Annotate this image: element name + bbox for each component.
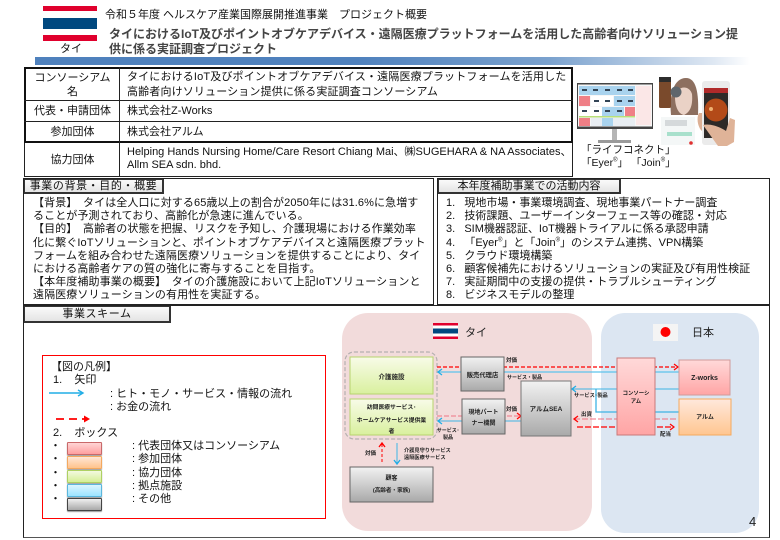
box: Z-Works xyxy=(679,360,730,395)
arrow: investment xyxy=(574,416,676,422)
row value: consortium name: タイにおけるIoT及びポイントオブケアデバイス・遠隔医療プラットフォームを活用した xyxy=(127,71,566,83)
image caption xyxy=(581,144,676,168)
row value: participant: 株式会社アルム xyxy=(127,126,204,138)
numbered list: 4. 「Eyer®」と「Join®」のシステム連携、VPN構築 xyxy=(446,237,703,249)
legend box descriptions: : 参加団体 xyxy=(132,453,182,465)
image caption: 「ライフコネクト」 xyxy=(581,144,676,156)
numbered list: 2. 技術課題、ユーザーインターフェース等の確認・対応 xyxy=(446,210,727,222)
legend bullets: ・ xyxy=(50,480,61,492)
body text: 化に繋ぐIoTソリューションと、ポイントオブケアデバイスと遠隔医療プラット xyxy=(33,237,426,249)
legend bullets: ・ xyxy=(50,493,61,505)
swatch: participant xyxy=(67,456,102,469)
arrow: service and product to Allm SEA xyxy=(572,386,679,392)
numbered list: 8. ビジネスモデルの整理 xyxy=(446,289,574,301)
eye scanner and face photo xyxy=(659,77,698,115)
flow label: payment at partner: 対価 xyxy=(506,405,518,413)
flow label: service to Allm SEA: サービス･製品 xyxy=(574,391,608,399)
header gradient bar xyxy=(35,57,750,65)
legend box descriptions: : 拠点施設 xyxy=(132,480,182,492)
box: distributor: 販売代理店 xyxy=(467,370,499,379)
legend box descriptions: : その他 xyxy=(132,493,171,505)
box: customers xyxy=(350,467,433,502)
product image: monitor, eye examination and phone xyxy=(577,77,735,146)
lower row frame xyxy=(24,143,573,177)
heading xyxy=(438,179,621,194)
numbered list: 5. クラウド環境構築 xyxy=(446,250,552,262)
arrow: care services to customer xyxy=(394,443,400,464)
body text: 【背景】 タイは全人口に対する65歳以上の割合が2050年には31.6%に急増す xyxy=(33,197,418,209)
swatch: other xyxy=(67,498,102,511)
flag label: タイ xyxy=(60,43,82,55)
legend box descriptions: : 代表団体又はコンソーシアム xyxy=(132,440,280,452)
body text: 【本年度補助事業の概要】 タイの介護施設において上記IoTソリューションと xyxy=(33,276,421,288)
body text: 遠隔医療ソリューションの有用性を実証する。 xyxy=(33,289,266,301)
legend text: flow of people and goods: : ヒト・モノ・サービス・情報の流れ xyxy=(110,388,292,400)
column divider xyxy=(119,67,120,177)
box: Allm xyxy=(679,399,731,435)
phone with retina image xyxy=(698,81,735,146)
title: タイにおけるIoT及びポイントオブケアデバイス・遠隔医療プラットフォームを活用した高齢者向けソリューション提 xyxy=(109,27,738,41)
box: consortium: コンソーシ xyxy=(623,390,649,397)
header subtitle: 令和５年度 ヘルスケア産業国際展開推進事業 プロジェクト概要 xyxy=(105,9,427,21)
row value: cooperating organisations xyxy=(127,146,571,171)
arrow: payment from care facility through distributor to Z-Works xyxy=(437,364,678,370)
legend section: boxes: 2. ボックス xyxy=(53,427,118,439)
panel: business scheme frame xyxy=(23,305,770,538)
row label: consortium name xyxy=(34,72,110,98)
legend arrow: flow of money xyxy=(56,416,90,422)
panel: Thailand xyxy=(342,313,592,531)
numbered list: 7. 実証期間中の支援の提供・トラブルシューティング xyxy=(446,276,717,288)
body text: における高齢者ケアの質の強化に寄与することを目指す。 xyxy=(33,263,320,275)
panel: background and purpose xyxy=(23,178,434,305)
flow label: service at partner: 製品 xyxy=(443,434,453,441)
box: care facility: 介護施設 xyxy=(378,372,405,381)
row label: consortium name: 名 xyxy=(67,86,78,98)
heading: 事業スキーム xyxy=(62,308,132,320)
flow label: dividend: 配当 xyxy=(660,430,671,438)
box: local partner: 現地パート xyxy=(468,408,499,416)
icon: small Thai flag xyxy=(433,323,458,339)
row label: representative: 代表・申請団体 xyxy=(34,105,111,117)
box: distributor xyxy=(461,357,504,391)
legend section: arrows: 1. 矢印 xyxy=(53,374,96,386)
row label: participant: 参加団体 xyxy=(50,126,94,138)
legend bullets xyxy=(50,440,61,505)
arrow: service and product to care facility xyxy=(438,369,679,375)
numbered list: 6. 顧客候補先におけるソリューションの実証及び有用性検証 xyxy=(446,263,750,275)
flow label: care services xyxy=(404,446,451,461)
icon: Thai flag xyxy=(43,6,97,41)
heading xyxy=(24,306,171,323)
swatch: base facility xyxy=(67,484,102,497)
box: home care provider: ホームケアサービス提供業 xyxy=(357,416,426,424)
dashed group: care providers xyxy=(345,352,437,439)
box: consortium: アム xyxy=(631,398,642,405)
swatch: representative xyxy=(67,442,102,455)
heading: 本年度補助事業での活動内容 xyxy=(458,180,600,192)
flow label: service at distributor: サービス・製品 xyxy=(507,374,542,381)
row value: consortium name: 高齢者向けソリューション提供に係る実証調査コンソーシアム xyxy=(127,86,438,98)
row divider one xyxy=(24,100,573,101)
thick table frame xyxy=(24,67,573,143)
legend title: 【図の凡例】 xyxy=(51,361,117,373)
legend bullets: ・ xyxy=(50,453,61,465)
panel: activities this fiscal year xyxy=(437,178,770,305)
row label: cooperating organisations: 協力団体 xyxy=(50,154,94,166)
numbered list xyxy=(446,196,750,301)
box: Z-Works: Z-works xyxy=(691,375,718,382)
title xyxy=(109,27,738,56)
legend box descriptions: : 協力団体 xyxy=(132,467,182,479)
box: home care provider: 訪問医療サービス･ xyxy=(367,403,416,411)
legend xyxy=(42,355,326,519)
arrow: customer payment xyxy=(379,443,385,462)
box: consortium xyxy=(617,358,655,435)
arrow: partner payment to Allm SEA xyxy=(437,413,521,419)
box: Allm SEA xyxy=(521,381,571,436)
row value: consortium name xyxy=(127,70,566,98)
flow label: investment: 出資 xyxy=(581,410,593,418)
flow label: customer payment: 対価 xyxy=(365,449,377,457)
monitor xyxy=(577,83,653,143)
flow label: care services: 遠隔医療サービス xyxy=(404,453,446,461)
image caption: 「Eyer®」 「Join®」 xyxy=(581,156,676,168)
legend box descriptions xyxy=(132,440,280,505)
legend text: flow of money: : お金の流れ xyxy=(110,401,171,413)
flow label: service at partner xyxy=(437,427,459,441)
label: Thailand: タイ xyxy=(465,326,487,339)
body text: 【目的】 高齢者の状態を把握、リスクを予知し、介護現場における作業効率 xyxy=(33,223,416,235)
box: customers: 顧客 xyxy=(385,474,398,482)
panel: Japan xyxy=(601,313,759,533)
body text xyxy=(33,196,426,301)
heading: 事業の背景・目的・概要 xyxy=(30,180,157,192)
icon: Japan flag xyxy=(653,324,678,341)
box: Allm: アルム xyxy=(696,414,714,421)
chat card xyxy=(661,117,695,145)
box: home care provider: 者 xyxy=(389,427,395,435)
body text: ることが予測されており、高齢化が急速に進んでいる。 xyxy=(33,210,309,222)
swatch: cooperating xyxy=(67,470,102,483)
numbered list: 3. SIM機器認証、IoT機器トライアルに係る承認申請 xyxy=(446,223,709,235)
arrow: service to home care providers xyxy=(438,418,521,424)
legend arrow: flow of people and goods xyxy=(49,389,84,397)
box: Allm SEA: アルムSEA xyxy=(530,405,563,413)
box: local partner xyxy=(462,399,505,434)
flow label: service at partner: サービス･ xyxy=(437,427,459,434)
box: care facility xyxy=(350,357,433,394)
connector: elbow to consortium xyxy=(596,389,679,412)
box: local partner: ナー機関 xyxy=(471,419,496,427)
row divider two xyxy=(24,121,573,122)
legend bullets: ・ xyxy=(50,440,61,452)
page number: 4 xyxy=(749,514,756,529)
scheme diagram xyxy=(342,313,759,533)
row label: consortium name: コンソーシアム xyxy=(34,72,110,84)
panel: project information table xyxy=(24,67,573,177)
flow label: payment at distributor: 対価 xyxy=(506,356,518,364)
title: 供に係る実証調査プロジェクト xyxy=(109,42,277,56)
numbered list: 1. 現地市場・事業環境調査、現地事業パートナー調査 xyxy=(446,197,717,209)
arrow: dividend xyxy=(577,424,674,430)
flow label: care services: 介護見守りサービス xyxy=(404,446,451,454)
box: home care provider xyxy=(350,399,433,435)
legend bullets: ・ xyxy=(50,467,61,479)
row value: cooperating organisations: Allm SEA sdn. bhd. xyxy=(127,159,221,171)
body text: フォームを組み合わせた遠隔医療ソリューションを提供することにより、タイ xyxy=(33,250,420,262)
box: customers: (高齢者・家族) xyxy=(373,486,410,494)
row value: representative: 株式会社Z-Works xyxy=(127,105,212,117)
row value: cooperating organisations: Helping Hands Nursing Home/Care Resort Chiang Mai、㈱SUGEHARA & NA Associates、 xyxy=(127,146,571,158)
label: Japan: 日本 xyxy=(692,325,714,339)
